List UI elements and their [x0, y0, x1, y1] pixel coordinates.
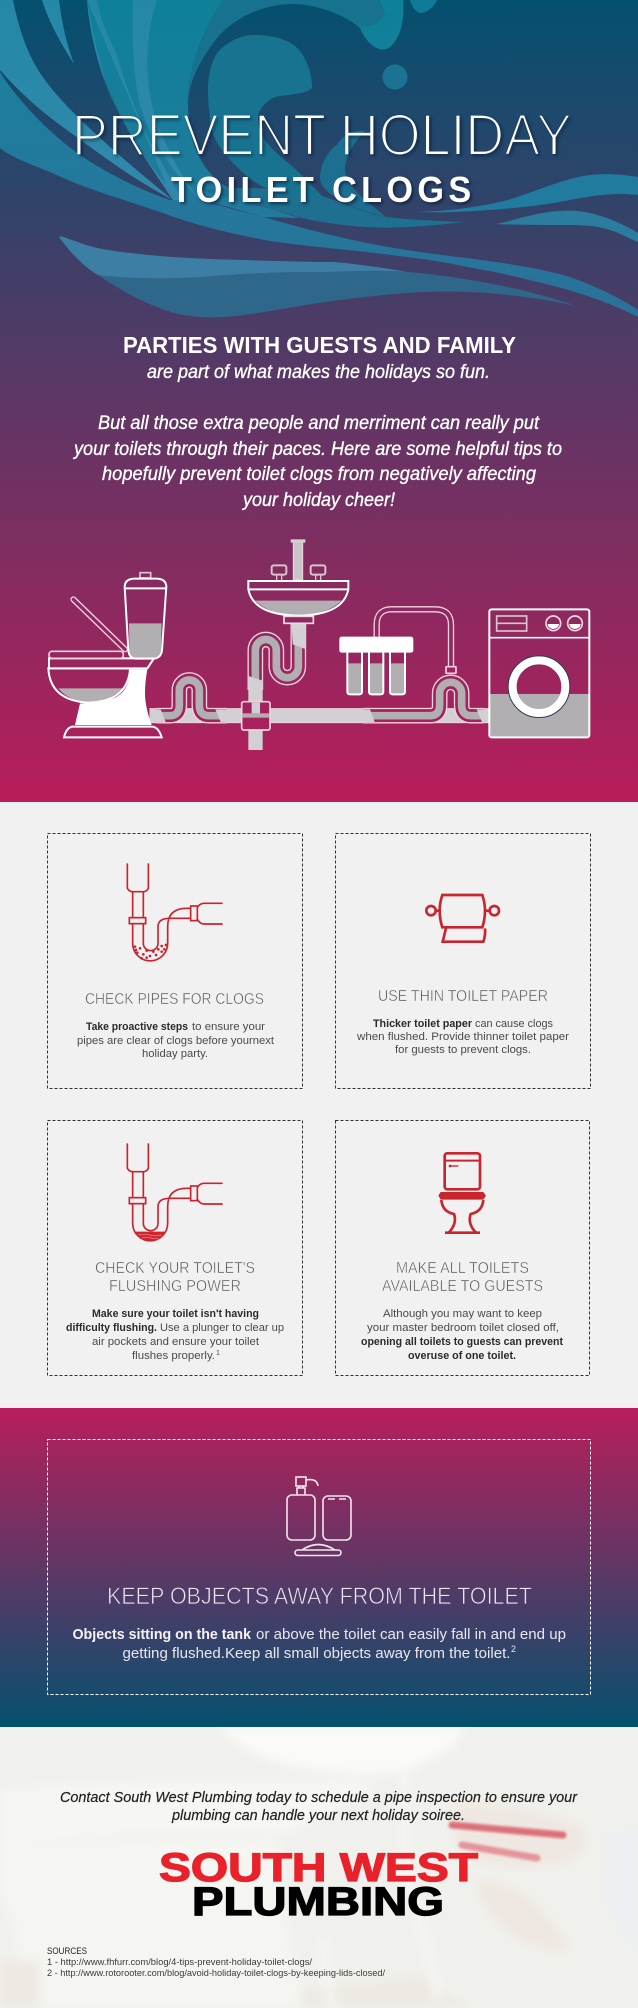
heading [382, 1260, 543, 1295]
call to action text [60, 1789, 578, 1824]
logo line 1: SOUTH WEST [159, 1846, 478, 1890]
heading: CHECK PIPES FOR CLOGS [85, 991, 264, 1008]
card: use thin toilet paper [336, 834, 590, 1088]
body text [66, 1308, 284, 1362]
heading: AVAILABLE TO GUESTS [382, 1278, 543, 1295]
body text: difficulty flushing. [66, 1322, 157, 1334]
icon: soap bottles [287, 1477, 351, 1556]
body text [72, 1626, 566, 1662]
body text: or above the toilet can easily fall in and end up [256, 1626, 566, 1643]
body text: can cause clogs [475, 1018, 553, 1030]
body text: Although you may want to keep [383, 1308, 542, 1320]
icon: toilet paper roll [426, 895, 499, 942]
body text [77, 1021, 275, 1060]
body text: Make sure your toilet isn't having [92, 1308, 259, 1320]
body text: Objects sitting on the tank [72, 1626, 252, 1643]
toilet [48, 573, 166, 737]
card: make all toilets available to guests [336, 1120, 590, 1376]
panel: faded plumber photo background [0, 1727, 638, 2008]
panel: header gradient background [0, 0, 638, 802]
body text: when flushed. Provide thinner toilet paper [356, 1031, 569, 1043]
intro heading: PARTIES WITH GUESTS AND FAMILY [123, 332, 516, 358]
intro paragraph: hopefully prevent toilet clogs from negatively affecting [102, 463, 536, 485]
body text: holiday party. [142, 1048, 208, 1060]
pipe junction box [242, 702, 270, 730]
right pipe bend [363, 682, 483, 716]
logo: South West Plumbing [159, 1846, 478, 1924]
body text [356, 1018, 569, 1056]
icon: pipe with water [127, 1143, 223, 1241]
heading [95, 1260, 255, 1295]
heading: CHECK YOUR TOILET'S [95, 1260, 255, 1277]
panel: tips background [0, 802, 638, 1408]
panel: keep objects away gradient background [0, 1408, 638, 1727]
body text: 2 [511, 1644, 516, 1654]
body text: flushes properly. [132, 1350, 215, 1362]
title line 1: PREVENT HOLIDAY [72, 103, 572, 168]
intro paragraph: But all those extra people and merriment can really put [98, 412, 540, 434]
title [72, 103, 572, 210]
card: check pipes for clogs [48, 834, 302, 1088]
left pipe bend [157, 680, 227, 716]
logo line 2: PLUMBING [192, 1880, 444, 1924]
body text: Thicker toilet paper [373, 1018, 473, 1030]
body text: getting flushed.Keep all small objects away from the toilet. [122, 1645, 510, 1662]
body text: for guests to prevent clogs. [395, 1044, 531, 1056]
body text: to ensure your [192, 1021, 265, 1033]
body text: pipes are clear of clogs before yournext [77, 1035, 275, 1047]
sources [47, 1946, 386, 1978]
sink trap [255, 622, 298, 690]
washing machine [489, 609, 589, 737]
card: check your toilet's flushing power [48, 1120, 302, 1376]
photo: pliers [452, 1825, 563, 1858]
card: keep objects away from the toilet [48, 1440, 590, 1694]
heading: KEEP OBJECTS AWAY FROM THE TOILET [107, 1583, 532, 1610]
source 2: 2 - http://www.rotorooter.com/blog/avoid-holiday-toilet-clogs-by-keeping-lids-closed/ [47, 1968, 386, 1978]
body text: your master bedroom toilet closed off, [367, 1322, 559, 1334]
body text: air pockets and ensure your toilet [92, 1336, 260, 1348]
water filter supply pipe [377, 609, 456, 673]
heading: USE THIN TOILET PAPER [378, 988, 548, 1005]
body text: opening all toilets to guests can prevent [361, 1336, 563, 1348]
body text: Take proactive steps [86, 1021, 188, 1033]
intro paragraph [72, 412, 562, 511]
intro text [72, 332, 562, 511]
title line 2: TOILET CLOGS [171, 170, 471, 210]
heading: MAKE ALL TOILETS [396, 1260, 529, 1277]
main drain pipe [150, 709, 490, 723]
body text: Use a plunger to clear up [160, 1322, 284, 1334]
light pipe sections [150, 624, 489, 750]
intro paragraph: your holiday cheer! [241, 489, 396, 511]
body text: 1 [216, 1350, 220, 1357]
illustration: teal wave [0, 0, 638, 317]
illustration: plumbing system [48, 539, 589, 750]
body text: overuse of one toilet. [408, 1350, 516, 1362]
sources heading: SOURCES [47, 1946, 87, 1956]
source 1: 1 - http://www.fhfurr.com/blog/4-tips-prevent-holiday-toilet-clogs/ [47, 1957, 313, 1967]
icon: clogged pipe [127, 863, 223, 961]
call to action text: plumbing can handle your next holiday soiree. [171, 1807, 465, 1824]
call to action text: Contact South West Plumbing today to schedule a pipe inspection to ensure your [60, 1789, 578, 1806]
body text [361, 1308, 563, 1362]
sink [248, 539, 348, 623]
heading: FLUSHING POWER [109, 1278, 241, 1295]
water filter [339, 637, 413, 694]
icon: toilet [438, 1153, 486, 1233]
intro subheading: are part of what makes the holidays so fun. [147, 361, 490, 383]
intro paragraph: your toilets through their paces. Here are some helpful tips to [72, 438, 562, 460]
